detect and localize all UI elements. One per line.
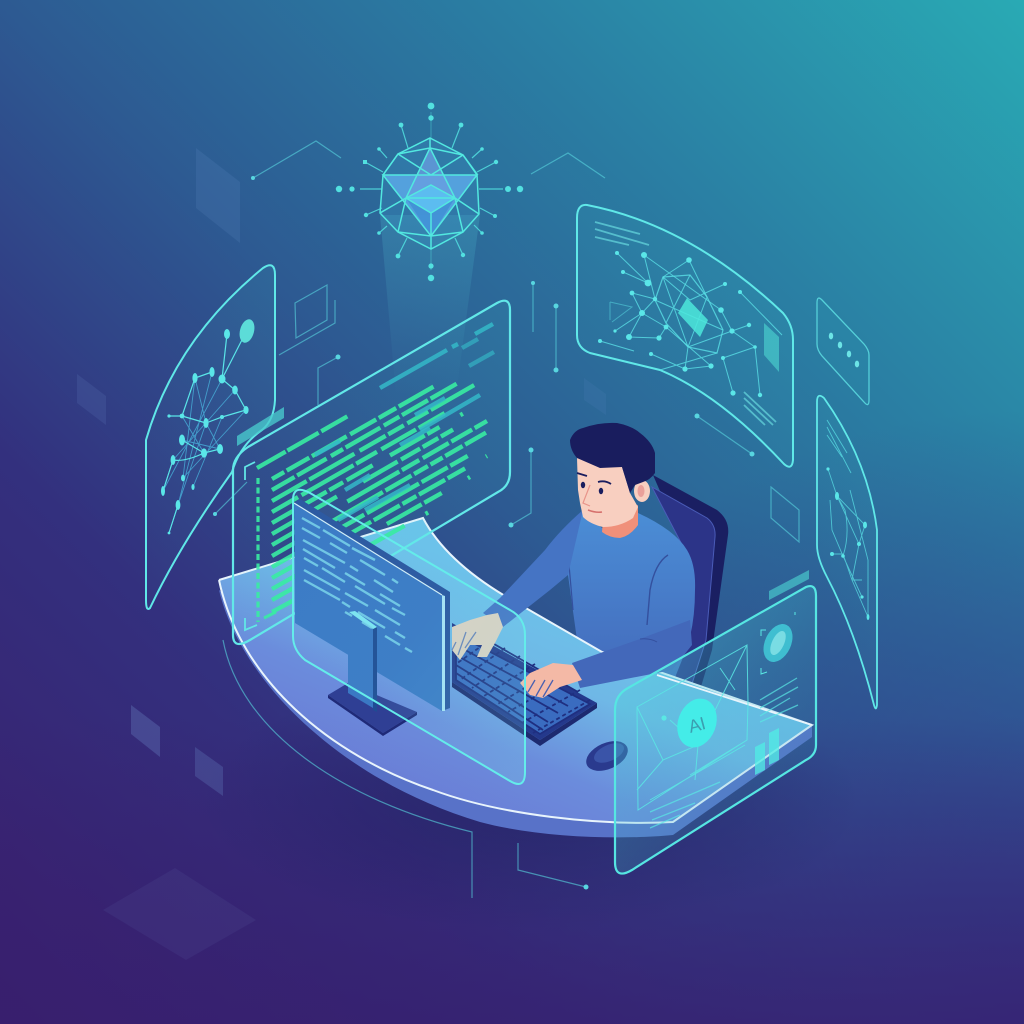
chair — [652, 475, 728, 690]
desk edge over panel — [657, 675, 812, 725]
corner brackets — [245, 462, 257, 630]
face — [577, 458, 638, 527]
person: arms and hands — [452, 510, 692, 698]
icon: mouse — [582, 735, 632, 777]
network graph — [598, 251, 782, 397]
AI badge: AI — [686, 713, 708, 737]
circuit lines — [213, 141, 799, 898]
bars — [755, 728, 779, 775]
right arm — [572, 620, 692, 688]
desk — [219, 518, 812, 837]
text lines — [650, 678, 798, 828]
neck — [602, 505, 638, 538]
screen — [294, 503, 442, 711]
AI badge — [671, 693, 723, 753]
ear — [634, 480, 650, 502]
screen code lines — [302, 518, 412, 652]
right hand — [520, 663, 582, 698]
left arm — [483, 510, 583, 627]
front glass panel — [293, 490, 525, 784]
panel: right tall — [769, 396, 877, 708]
screen back edge — [294, 499, 450, 711]
person: torso — [565, 510, 695, 690]
eyes and brows — [577, 473, 611, 512]
brain icon — [758, 612, 798, 674]
text lines — [595, 222, 776, 425]
left hand — [452, 613, 503, 660]
panel: AI glass — [615, 586, 816, 874]
person: head — [570, 423, 655, 538]
hair — [570, 423, 655, 493]
panel: left network — [146, 265, 284, 609]
stand neck — [348, 615, 373, 708]
panel: code editor — [233, 301, 510, 644]
icon: AI polyhedron — [336, 103, 523, 281]
map chart — [637, 645, 748, 810]
decorative floating squares — [77, 148, 606, 960]
stand base — [328, 683, 417, 733]
keyboard — [452, 623, 597, 746]
panel: small dots — [817, 298, 869, 405]
light beam — [380, 215, 480, 395]
network graph — [161, 318, 257, 534]
monitor — [294, 499, 450, 736]
code lines — [257, 376, 490, 622]
panel: top right network — [577, 205, 793, 467]
